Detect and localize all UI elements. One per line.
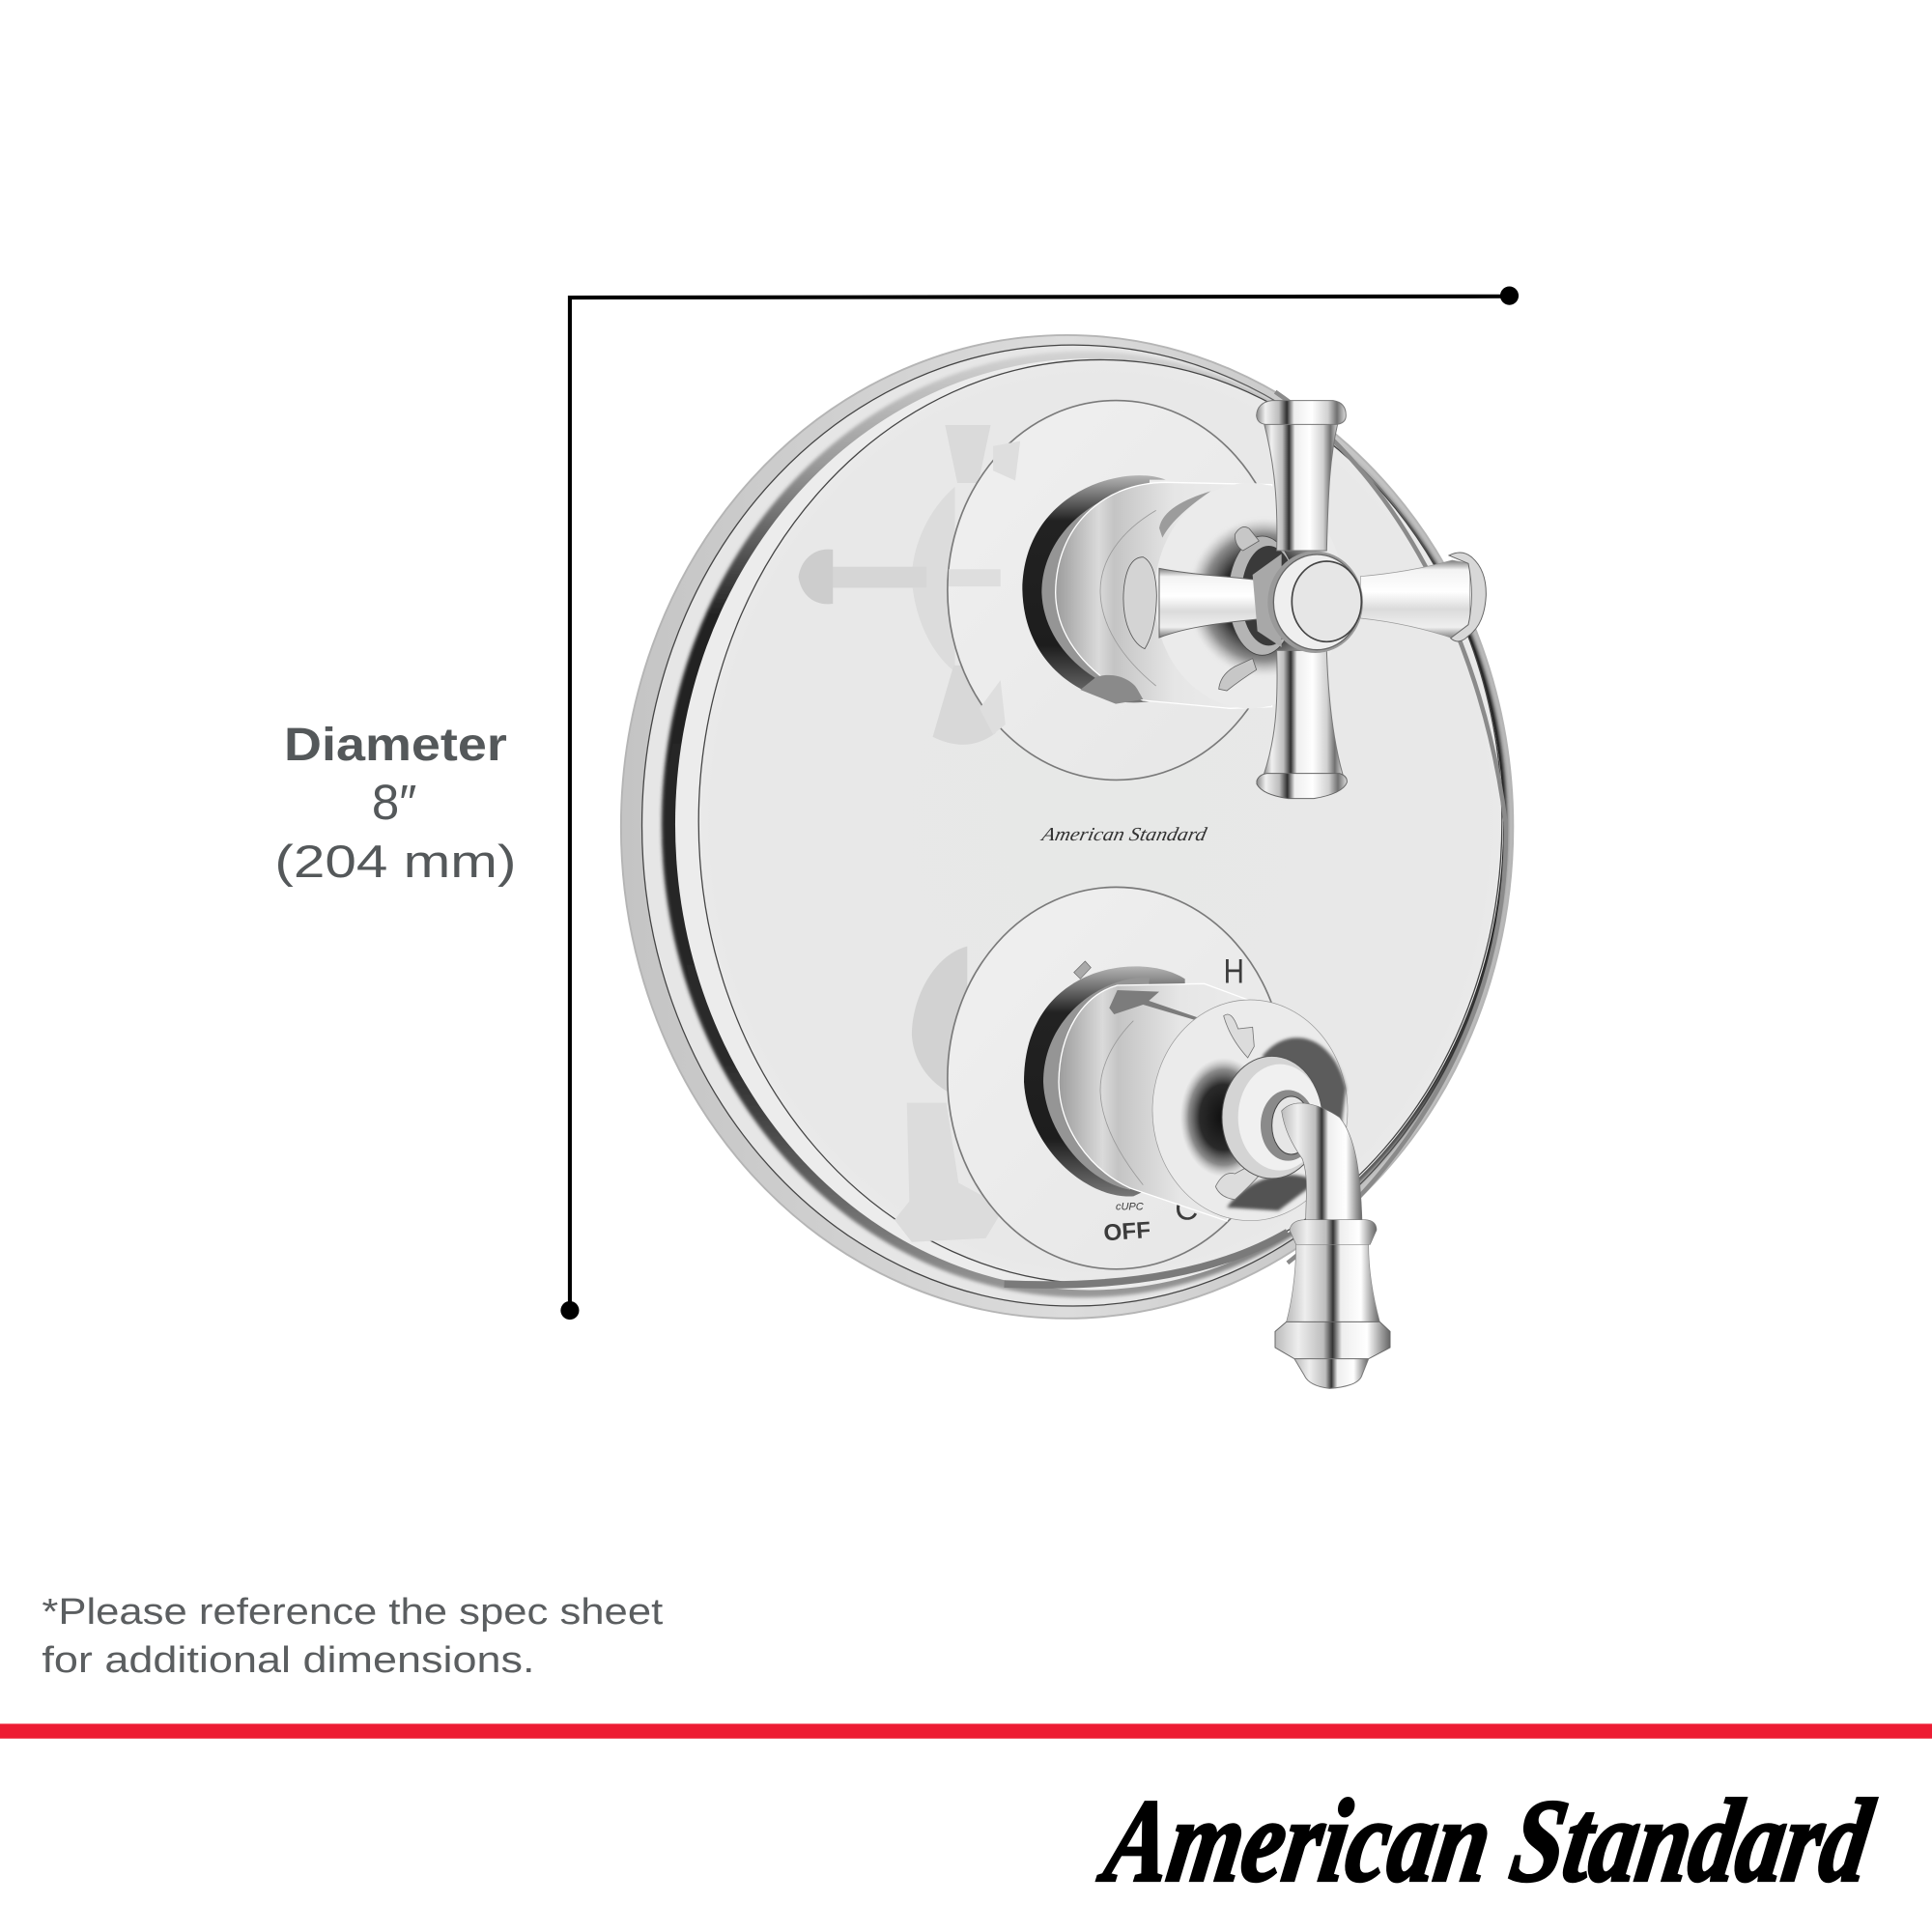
product: thermostatic valve trim [621, 335, 1513, 1388]
upper cross handle [1123, 401, 1486, 799]
upper handle assembly [1022, 401, 1486, 799]
lower handle assembly [1024, 952, 1390, 1388]
dial markings: H [1224, 952, 1244, 990]
plate logo: American Standard [1038, 824, 1209, 845]
dial markings: C [1175, 1192, 1198, 1228]
escutcheon: lower dial [948, 887, 1285, 1269]
trim plate: layered round rim [621, 335, 1513, 1319]
dial markings: cUPC [1116, 1202, 1144, 1213]
text: diameter measurement: Diameter [284, 719, 507, 771]
red divider bar [0, 1723, 1932, 1739]
dial markings: OFF [1103, 1217, 1151, 1246]
upper knob face [1154, 483, 1345, 708]
upper valve body [1022, 475, 1272, 708]
footnote: for additional dimensions. [42, 1639, 535, 1680]
reflection on upper dial [949, 441, 1020, 734]
text: diameter measurement: (204 mm) [274, 837, 516, 888]
dimension line: diameter bracket [560, 287, 1519, 1320]
dial markings [1103, 952, 1244, 1246]
reflection: ghost lever handle [895, 947, 1005, 1242]
footnote: *Please reference the spec sheet [42, 1591, 664, 1632]
escutcheon: upper dial [948, 401, 1285, 780]
lower knob face [1152, 1000, 1348, 1221]
footnote [42, 1591, 664, 1680]
lower lever handle [1222, 1056, 1390, 1388]
text: diameter measurement: 8″ [372, 775, 416, 830]
reflection: ghost cross handle [799, 425, 996, 745]
lower valve body [1024, 961, 1278, 1221]
text: diameter measurement [274, 719, 516, 888]
